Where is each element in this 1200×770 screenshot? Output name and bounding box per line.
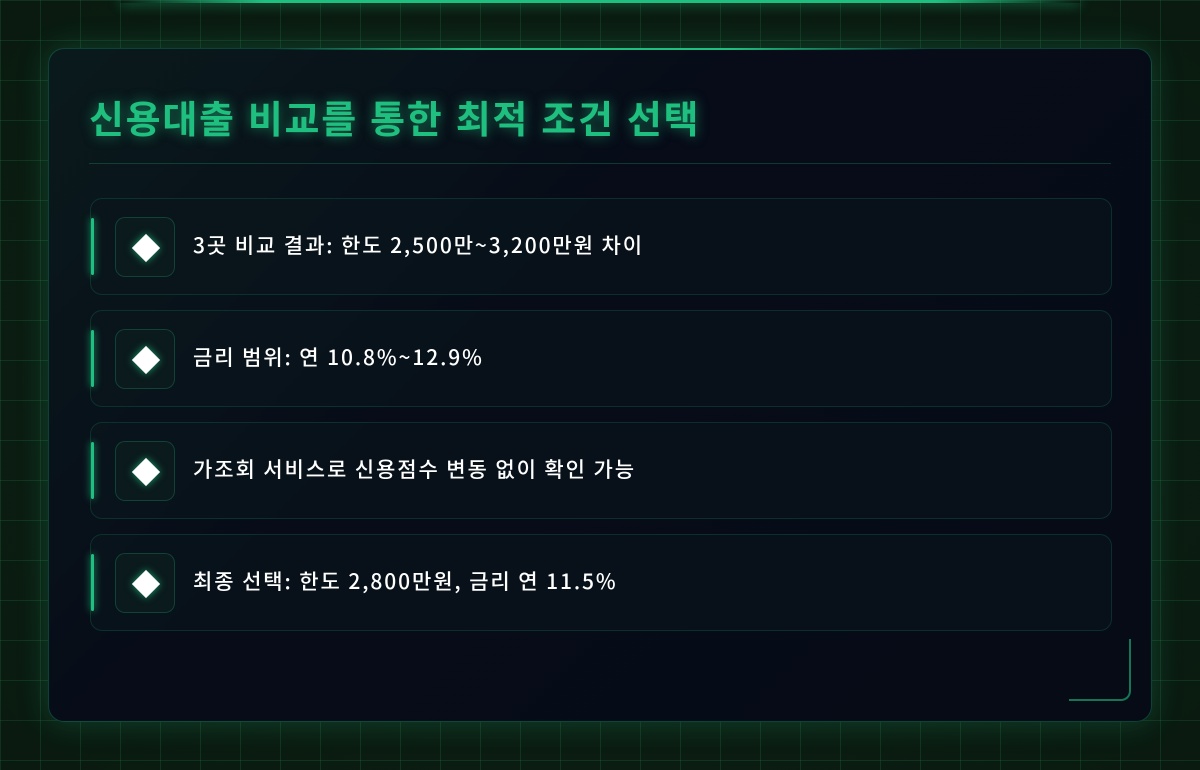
item 3 (90, 422, 1112, 519)
text: 3곳 비교 결과: 한도 2,500만~3,200만원 차이 (193, 230, 644, 260)
icon: diamond (115, 329, 175, 389)
item 1 (90, 198, 1112, 295)
item 4 (90, 534, 1112, 631)
text: 가조회 서비스로 신용점수 변동 없이 확인 가능 (193, 454, 636, 484)
icon: diamond (115, 217, 175, 277)
item 2 (90, 310, 1112, 407)
icon: diamond (115, 441, 175, 501)
icon: diamond (115, 553, 175, 613)
title: 신용대출 비교를 통한 최적 조건 선택 (89, 100, 700, 142)
text: 금리 범위: 연 10.8%~12.9% (193, 342, 484, 372)
text: 최종 선택: 한도 2,800만원, 금리 연 11.5% (193, 566, 618, 596)
